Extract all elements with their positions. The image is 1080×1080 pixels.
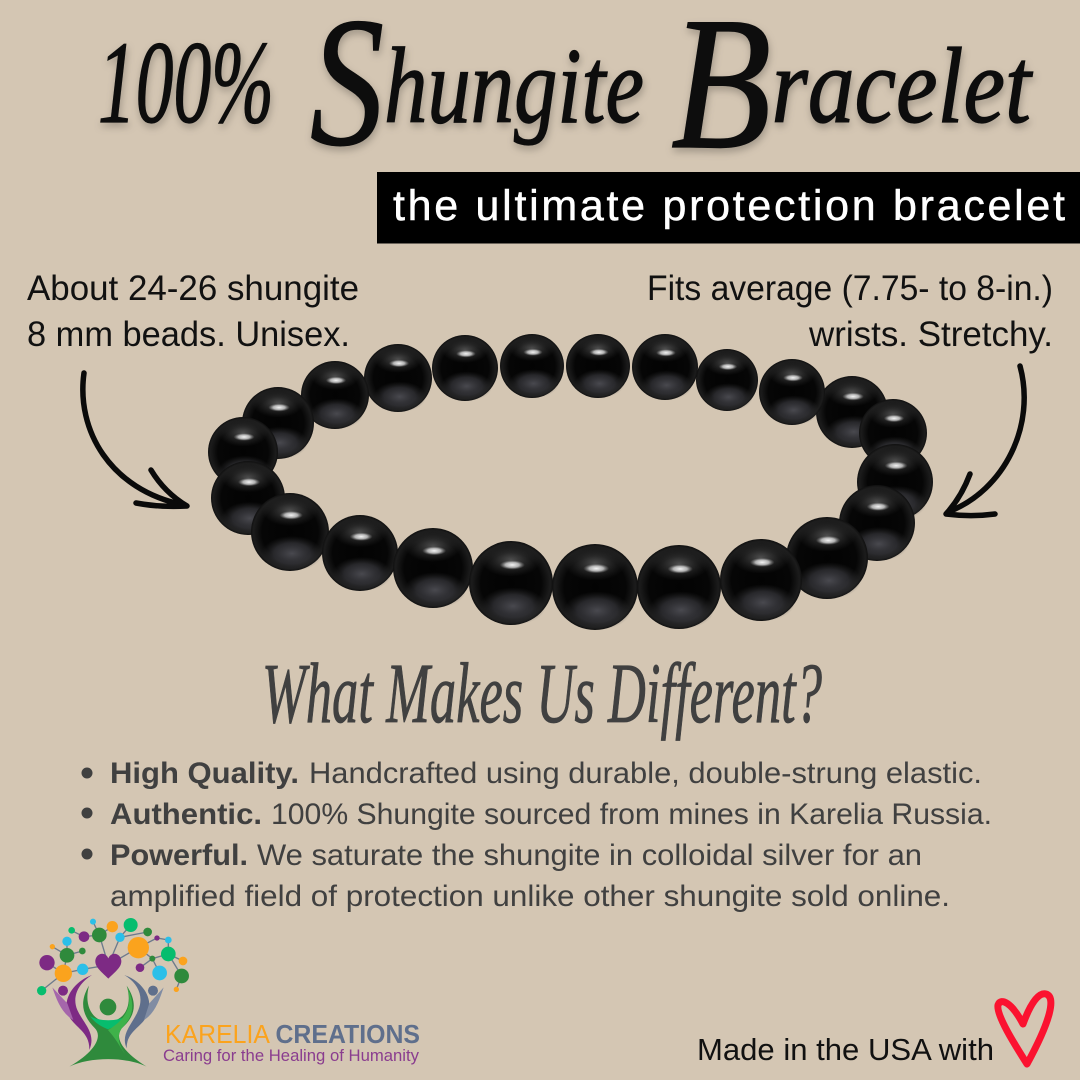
logo: Karelia Creations — [37, 918, 420, 1067]
title: 100% — [98, 17, 274, 148]
bullet: powerful: Powerful. — [110, 839, 248, 872]
bullet list — [82, 757, 992, 913]
title: hungite — [384, 27, 644, 146]
bullet: powerful: amplified field of protection unlike other shungite sold online. — [110, 880, 950, 913]
logo wordmark: KARELIA CREATIONS — [165, 1019, 420, 1049]
title: racelet — [771, 27, 1034, 146]
bullet: high quality: Handcrafted using durable, double-strung elastic. — [309, 757, 982, 790]
title — [98, 0, 1034, 189]
left arrow — [83, 373, 187, 506]
right spec text — [647, 269, 1053, 354]
left spec text: About 24-26 shungite — [27, 269, 359, 308]
made in the USA note: Made in the USA with — [697, 1032, 994, 1067]
logo icon: tree of people — [37, 918, 189, 1067]
subtitle banner — [377, 172, 1080, 244]
right spec text: wrists. Stretchy. — [808, 315, 1053, 354]
front row beads — [211, 444, 933, 630]
left spec text: 8 mm beads. Unisex. — [27, 315, 350, 354]
bullet: authentic: Authentic. — [110, 798, 262, 831]
bullet: high quality: High Quality. — [110, 757, 299, 790]
logo tagline: Caring for the Healing of Humanity — [163, 1046, 419, 1065]
bullet: powerful — [82, 839, 950, 913]
subtitle banner: the ultimate protection bracelet — [393, 182, 1065, 230]
bullet: powerful: We saturate the shungite in colloidal silver for an — [257, 839, 922, 872]
right spec text: Fits average (7.75- to 8-in.) — [647, 269, 1053, 308]
right arrow — [946, 366, 1024, 516]
bullet: authentic: 100% Shungite sourced from mines in Karelia Russia. — [271, 798, 992, 831]
bracelet photo — [208, 334, 933, 630]
icon: red heart — [998, 994, 1051, 1064]
back row beads — [208, 334, 927, 487]
left spec text — [27, 269, 359, 354]
